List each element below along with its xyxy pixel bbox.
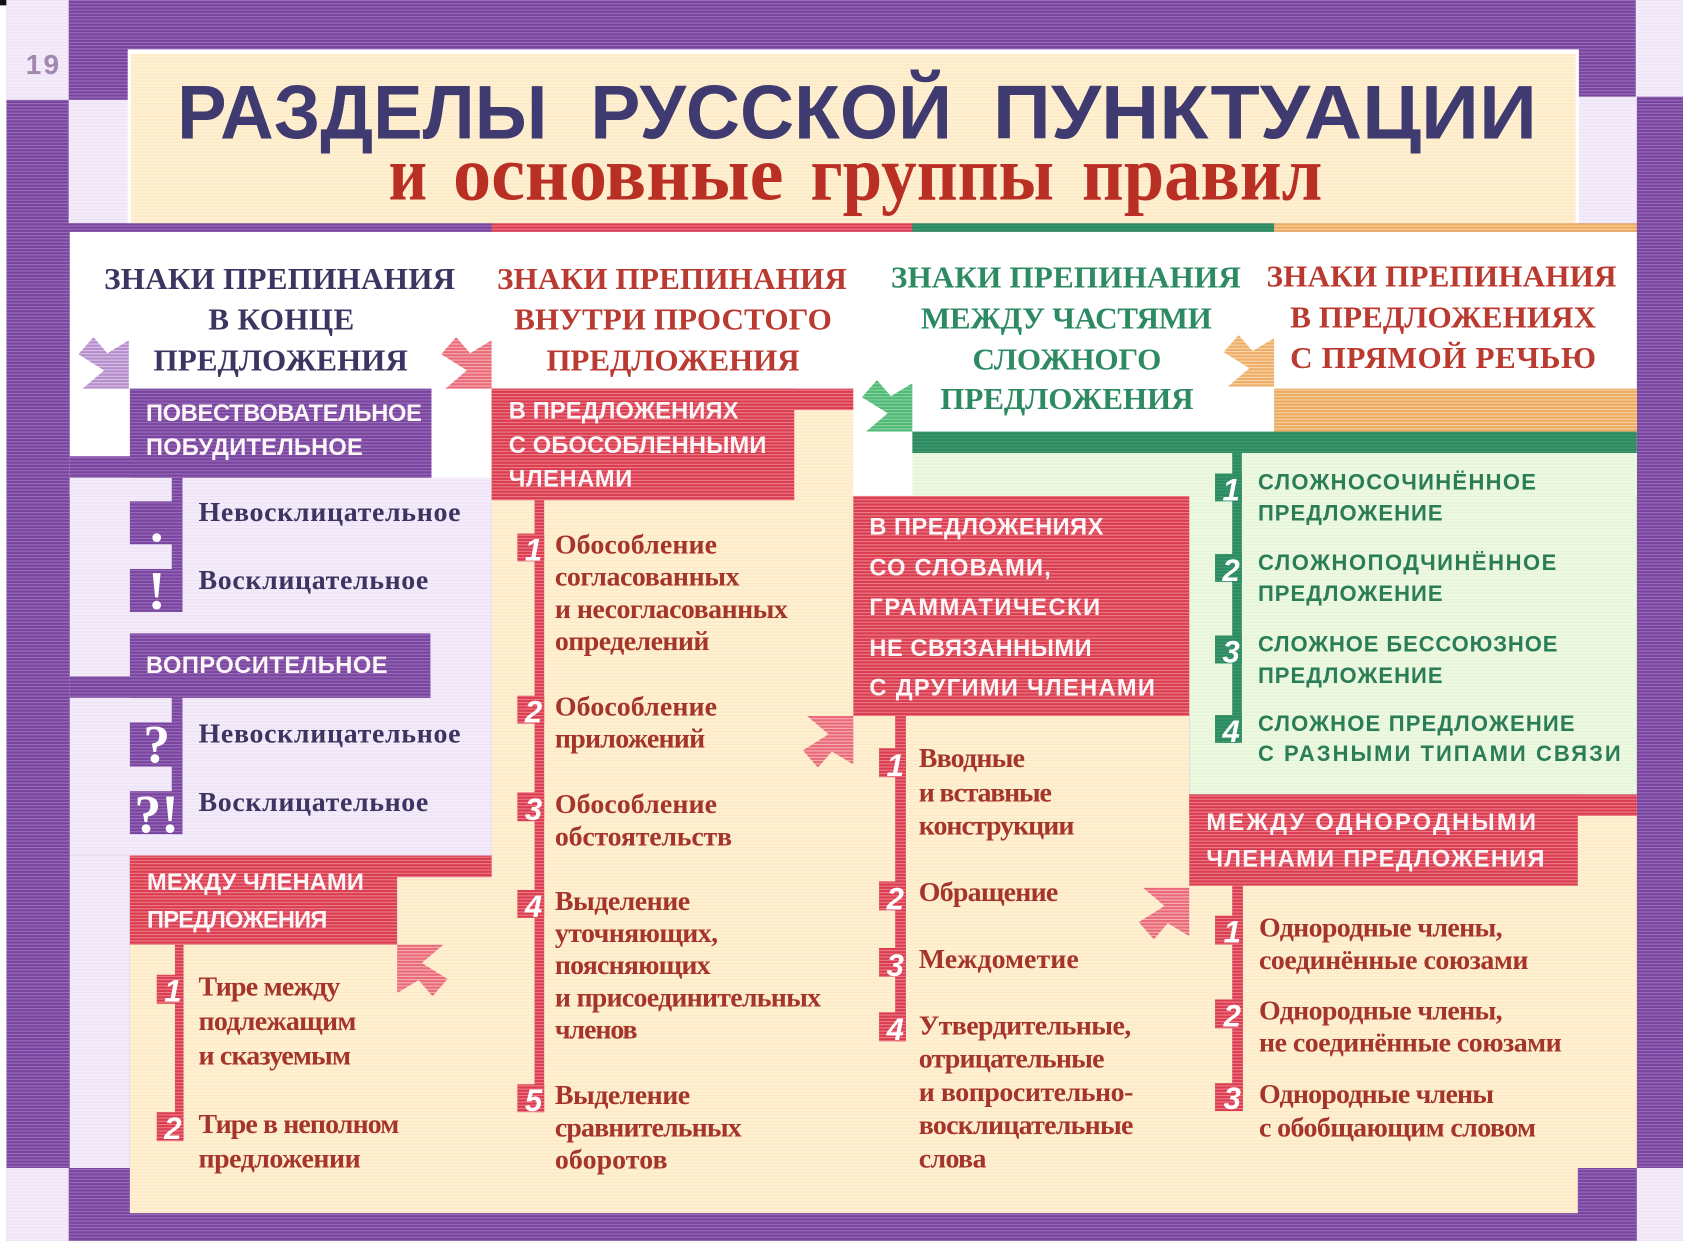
- arrow: red: [397, 945, 448, 996]
- item 4: [517, 886, 821, 1046]
- heading: СЛОЖНОГО: [972, 341, 1161, 376]
- panel: end of sentence: [70, 261, 492, 1168]
- item 3: Однородные члены: [1259, 1079, 1494, 1110]
- item 1: ПРЕДЛОЖЕНИЕ: [1258, 501, 1443, 526]
- item 3: [517, 789, 732, 852]
- heading: ПРЕДЛОЖЕНИЯ: [546, 342, 800, 377]
- item 3: Обособление: [555, 789, 717, 820]
- item 1: и несогласованных: [555, 594, 788, 625]
- item 3: 3: [525, 792, 542, 827]
- arrow: red: [803, 716, 853, 768]
- orange block: [1274, 389, 1637, 432]
- cream content area: [130, 410, 1637, 1213]
- block heading: [1189, 794, 1637, 886]
- item 3: [879, 944, 1079, 983]
- item 4: поясняющих: [555, 950, 711, 981]
- subtitle: и: [389, 131, 427, 217]
- item: period: .: [150, 493, 163, 553]
- item 4: уточняющих,: [555, 918, 718, 949]
- item 1: [157, 972, 356, 1071]
- item 2: [517, 692, 717, 755]
- item 4: 4: [886, 1012, 904, 1047]
- page number: 19: [26, 49, 59, 80]
- item 2: [157, 1109, 399, 1174]
- item 4: Выделение: [555, 886, 690, 917]
- item 2: Тире в неполном: [199, 1109, 399, 1140]
- block: declarative: ПОБУДИТЕЛЬНОЕ: [146, 435, 363, 461]
- main title: ПУНКТУАЦИИ: [993, 70, 1537, 155]
- item 1: [879, 743, 1074, 842]
- item 1: 1: [1223, 472, 1240, 507]
- item 2: 2: [524, 694, 542, 729]
- item 2: [879, 877, 1058, 916]
- block heading: НЕ СВЯЗАННЫМИ: [869, 636, 1092, 662]
- item 4: и вопросительно-: [919, 1077, 1133, 1108]
- item 2: Однородные члены,: [1259, 995, 1503, 1026]
- colour strip under title: [69, 223, 1637, 232]
- block heading: В ПРЕДЛОЖЕНИЯХ: [509, 399, 739, 425]
- item 3: 3: [1224, 1081, 1241, 1116]
- item 1: Обособление: [555, 529, 717, 560]
- item 1: Однородные члены,: [1259, 913, 1503, 944]
- block heading: [147, 870, 364, 934]
- heading: ПРЕДЛОЖЕНИЯ: [940, 381, 1194, 416]
- block heading: В ПРЕДЛОЖЕНИЯХ: [869, 515, 1104, 541]
- item 1: 1: [887, 748, 904, 783]
- heading: ЗНАКИ ПРЕПИНАНИЯ: [1267, 259, 1616, 294]
- block heading: ГРАММАТИЧЕСКИ: [869, 595, 1100, 621]
- item 4: и присоединительных: [555, 982, 821, 1013]
- item 4: 4: [524, 889, 542, 924]
- arrow: red: [1139, 888, 1189, 939]
- subtitle: [389, 131, 1322, 217]
- item: exclamation: [130, 561, 428, 621]
- item: exclamation: !: [148, 561, 166, 621]
- block: interrogative: ВОПРОСИТЕЛЬНОЕ: [146, 653, 387, 679]
- item 1: СЛОЖНОСОЧИНЁННОЕ: [1258, 470, 1536, 495]
- item 4: [1215, 711, 1621, 766]
- item 2: 2: [1223, 998, 1241, 1033]
- item: period: [130, 493, 460, 553]
- subtitle: правил: [1082, 131, 1322, 217]
- item 5: [517, 1080, 742, 1176]
- item 4: 4: [1222, 714, 1240, 749]
- panel: words not grammatically linked: [803, 496, 1189, 1174]
- block heading: МЕЖДУ ОДНОРОДНЫМИ: [1206, 810, 1536, 836]
- block heading: МЕЖДУ ЧЛЕНАМИ: [147, 870, 364, 896]
- panel: direct speech: [1224, 259, 1637, 432]
- item 2: Обособление: [555, 692, 717, 723]
- arrow: red: [441, 337, 492, 389]
- heading: [1267, 259, 1616, 375]
- item 1: 1: [1224, 915, 1241, 950]
- heading: ЗНАКИ ПРЕПИНАНИЯ: [497, 261, 847, 296]
- item 1: 1: [525, 532, 542, 567]
- item 1: соединённые союзами: [1259, 945, 1528, 976]
- item 1: [1215, 913, 1528, 976]
- item 1: Вводные: [919, 743, 1025, 774]
- item 5: 5: [525, 1083, 543, 1118]
- heading: С ПРЯМОЙ РЕЧЬЮ: [1290, 340, 1596, 375]
- item 3: [1215, 1079, 1536, 1143]
- block heading: [492, 389, 853, 500]
- white header area: [70, 232, 1637, 496]
- heading: ЗНАКИ ПРЕПИНАНИЯ: [891, 260, 1241, 295]
- block heading: С ОБОСОБЛЕННЫМИ: [509, 433, 766, 459]
- item: question exclamation: Восклицательное: [199, 787, 428, 818]
- item 3: 3: [887, 948, 904, 983]
- item 2: ПРЕДЛОЖЕНИЕ: [1258, 581, 1443, 606]
- heading: МЕЖДУ ЧАСТЯМИ: [921, 300, 1212, 336]
- panel: inside a simple sentence: [441, 261, 853, 1176]
- panel: between sentence members: [130, 856, 492, 1174]
- block: interrogative: [130, 633, 430, 698]
- heading: end of sentence: В КОНЦЕ: [208, 302, 354, 337]
- item 1: Тире между: [199, 972, 340, 1003]
- item 3: СЛОЖНОЕ БЕССОЮЗНОЕ: [1258, 632, 1557, 657]
- item: question exclamation: ?!: [134, 784, 179, 844]
- title panel: [128, 49, 1579, 223]
- block heading: [853, 496, 1189, 716]
- block heading: ПРЕДЛОЖЕНИЯ: [147, 908, 327, 934]
- arrow: orange: [1224, 335, 1274, 386]
- item: question exclamation: [130, 784, 428, 844]
- arrow: green: [862, 380, 912, 432]
- item: question: Невосклицательное: [199, 718, 460, 749]
- item: period: Невосклицательное: [199, 497, 460, 528]
- panel: complex sentence types: [862, 260, 1637, 794]
- panel: homogeneous members: [1139, 794, 1637, 1143]
- item 1: и вставные: [919, 777, 1052, 808]
- block heading: ЧЛЕНАМИ ПРЕДЛОЖЕНИЯ: [1206, 846, 1545, 872]
- item 2: [1215, 550, 1556, 606]
- main title: РУССКОЙ: [590, 69, 952, 155]
- block: declarative: [130, 389, 431, 478]
- item: question: ?: [143, 714, 170, 774]
- item 1: и сказуемым: [199, 1040, 351, 1071]
- main title: РАЗДЕЛЫ: [177, 70, 547, 155]
- item 1: согласованных: [555, 562, 740, 593]
- heading: [497, 261, 847, 377]
- subtitle: группы: [810, 131, 1054, 217]
- item 4: членов: [555, 1015, 638, 1046]
- heading: end of sentence: ПРЕДЛОЖЕНИЯ: [153, 342, 408, 377]
- item 1: подлежащим: [199, 1006, 356, 1037]
- item 2: СЛОЖНОПОДЧИНЁННОЕ: [1258, 550, 1556, 575]
- subtitle: основные: [453, 131, 784, 217]
- item 2: 2: [1222, 553, 1240, 588]
- block heading: ЧЛЕНАМИ: [509, 466, 632, 492]
- item 3: Междометие: [919, 944, 1079, 975]
- item 5: Выделение: [555, 1080, 690, 1111]
- item 2: предложении: [199, 1143, 361, 1174]
- heading: В ПРЕДЛОЖЕНИЯХ: [1290, 299, 1597, 334]
- item 5: сравнительных: [555, 1112, 742, 1143]
- item 3: с обобщающим словом: [1259, 1112, 1536, 1143]
- item 3: [1215, 632, 1557, 688]
- item 2: [1215, 995, 1562, 1059]
- item 1: определений: [555, 626, 709, 657]
- block: declarative: ПОВЕСТВОВАТЕЛЬНОЕ: [146, 401, 422, 427]
- item 4: С РАЗНЫМИ ТИПАМИ СВЯЗИ: [1258, 741, 1621, 766]
- item 2: 2: [163, 1111, 182, 1146]
- item: question: [130, 714, 460, 774]
- item 2: не соединённые союзами: [1259, 1028, 1562, 1059]
- heading: end of sentence: [104, 261, 455, 377]
- heading: ВНУТРИ ПРОСТОГО: [514, 302, 832, 337]
- arrow: purple: [78, 337, 129, 389]
- item 5: оборотов: [555, 1145, 668, 1176]
- item 1: [517, 529, 788, 657]
- item 2: Обращение: [919, 877, 1058, 908]
- item 1: конструкции: [919, 811, 1074, 842]
- main title: [177, 69, 1537, 155]
- item 4: восклицательные: [919, 1110, 1133, 1141]
- heading: [891, 260, 1241, 416]
- block heading: СО СЛОВАМИ,: [869, 555, 1051, 581]
- item 1: 1: [164, 974, 182, 1009]
- item 4: Утвердительные,: [919, 1010, 1131, 1041]
- item 4: [879, 1010, 1133, 1174]
- item 4: СЛОЖНОЕ ПРЕДЛОЖЕНИЕ: [1258, 711, 1575, 736]
- item 4: слова: [919, 1143, 986, 1174]
- item 4: отрицательные: [919, 1044, 1104, 1075]
- item 2: 2: [886, 881, 904, 916]
- item 3: 3: [1223, 634, 1240, 669]
- item 1: [1215, 470, 1536, 526]
- item 3: ПРЕДЛОЖЕНИЕ: [1258, 663, 1443, 688]
- item: exclamation: Восклицательное: [199, 565, 428, 596]
- heading: end of sentence: ЗНАКИ ПРЕПИНАНИЯ: [104, 261, 455, 296]
- item 2: приложений: [555, 724, 705, 755]
- block heading: С ДРУГИМИ ЧЛЕНАМИ: [869, 676, 1155, 702]
- item 3: обстоятельств: [555, 821, 732, 852]
